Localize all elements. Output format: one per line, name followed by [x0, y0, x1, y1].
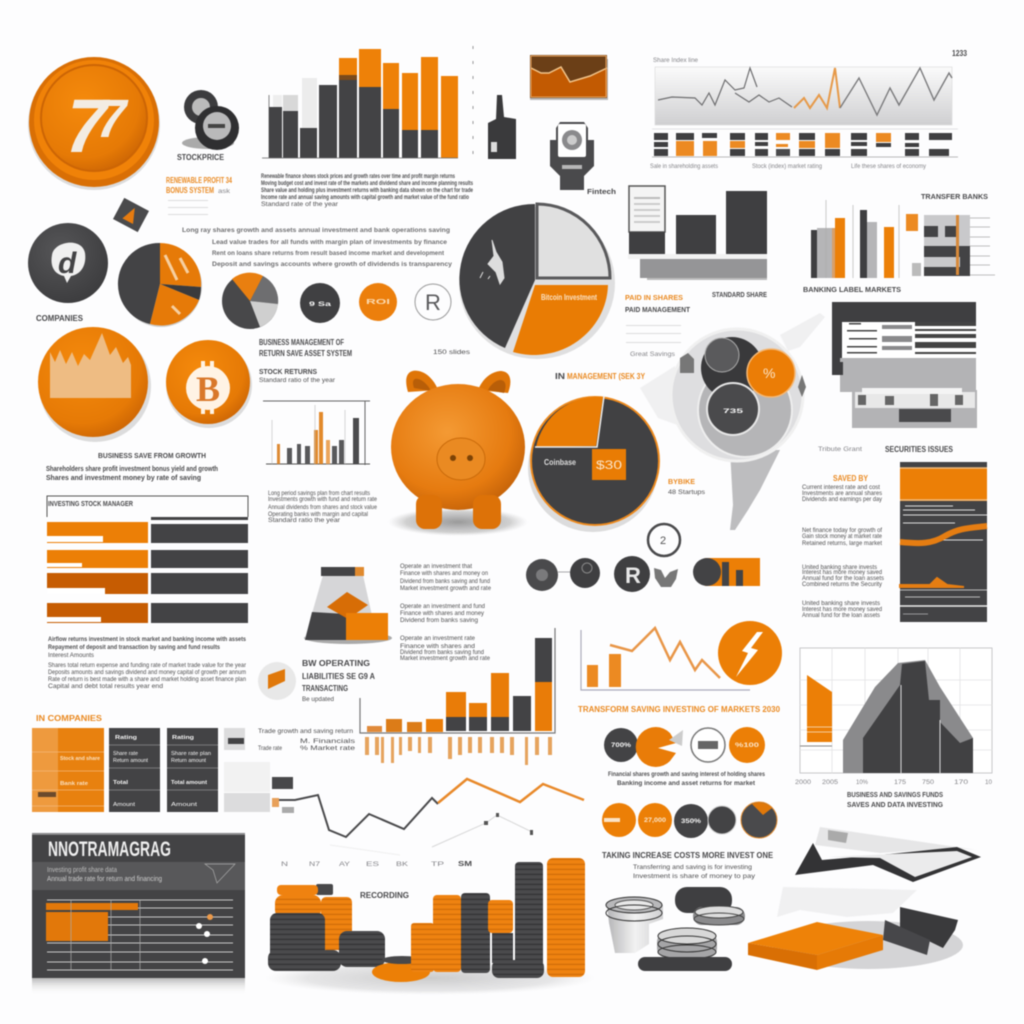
text block: right headings: Dividends and earnings per day [802, 497, 882, 503]
text block: left of lower chart: M. Financials [300, 739, 355, 745]
badge: 77 coin: 7 [56, 84, 117, 169]
area chart: mountain: SAVES AND DATA INVESTING [847, 802, 944, 809]
text block: beside funnel: Finance with shares and money on [400, 571, 488, 577]
text block: right headings: Interest has more money saved [802, 570, 882, 576]
caption: pie side note [668, 479, 705, 496]
big pie chart [459, 204, 615, 359]
text block: left of lower chart: Trade growth and saving return [258, 729, 353, 735]
pie chart: grey segments [222, 273, 278, 329]
icon: dark at-sign coin: d [58, 247, 77, 280]
line chart: dark then orange: TP [431, 862, 444, 868]
thumbnail: brown line chart [530, 55, 608, 100]
icon: small rotated tile [113, 198, 149, 232]
icons row: pacman and coins: 700% [611, 743, 632, 749]
table: dark column one: Total [113, 780, 129, 786]
line chart with stripes: top right: Sale in shareholding assets [650, 164, 718, 170]
line chart: dark then orange: BK [396, 862, 408, 868]
table chart: right stripes: TRANSFER BANKS [921, 194, 988, 201]
heading: chart title: RETURN SAVE ASSET SYSTEM [259, 349, 352, 358]
text block: left of globe: PAID MANAGEMENT [625, 307, 691, 314]
text block: top paragraph: Moving budget cost and invest rate of the markets and dividend share and income planning results [261, 181, 473, 187]
text block: bottom right caption [602, 851, 774, 880]
text block: right headings: Current interest rate and cost [802, 485, 880, 491]
text block: beside funnel: Operate an investment and fund [400, 604, 485, 610]
text block: left of globe: Great Savings [630, 352, 675, 358]
text block: beside funnel [400, 564, 492, 662]
text block: beside funnel: Market investment growth and rate [400, 656, 491, 662]
text block: right headings: Combined returns the Security [802, 582, 882, 588]
icon: stacked coins [177, 90, 239, 162]
table: orange column [32, 728, 104, 812]
bar chart: three dark bars: STANDARD SHARE [712, 292, 767, 299]
area chart: mountain: 10 [985, 780, 993, 786]
table: orange column: Bank rate [60, 781, 88, 787]
text block: beside funnel: Market investment growth and rate [400, 586, 492, 592]
line chart: dark then orange: ES [366, 862, 379, 868]
icon: smart watch [550, 122, 616, 196]
text block: left of globe [625, 295, 691, 358]
line chart: dark then orange: N7 [309, 862, 321, 868]
table: dark column two: Share rate plan [171, 751, 211, 757]
bar chart: small ticks [263, 401, 370, 465]
icon: dark circle label: 9 Sa [309, 302, 332, 308]
icon and heading: small globe title: BW OPERATING [302, 659, 370, 668]
text block: below table: Shares total return expense and funding rate of market trade value for the year [48, 663, 246, 669]
area chart: mountain: 175 [894, 780, 907, 786]
text block: under small chart: Operating banks with margin and capital [268, 512, 368, 518]
text block: below table: Airflow returns investment in stock market and banking income with assets [48, 637, 247, 643]
heading: chart title: 150 slides [433, 350, 470, 356]
text block: below table: Interest Amounts [48, 653, 94, 659]
text block: bottom right caption: TAKING INCREASE COSTS MORE INVEST ONE [602, 851, 774, 860]
area chart: mountain: 2005 [822, 780, 839, 786]
table: dark column one: Rating [115, 735, 137, 741]
text block: right headings: United banking share invests [802, 601, 880, 607]
text block: under small chart: Annual dividends from shares and stock value [268, 505, 378, 511]
text block: below table: Repayment of deposit and transaction by saving and fund results [48, 645, 221, 651]
text block: right headings: Net finance today for growth of [802, 528, 882, 534]
text block: second paragraph: Rent on loans share returns from result based income market and development [212, 251, 444, 257]
text block: below table: Capital and debt total results year end [48, 684, 163, 690]
column chart panel: right [900, 462, 987, 622]
table: dark column two: Rating [172, 735, 194, 741]
line chart: dark then orange [279, 779, 584, 868]
icons row: pacman and coins: %100 [735, 743, 760, 749]
heading: chart title [259, 338, 470, 384]
coin stacks: RECORDING [360, 891, 409, 900]
text block: bottom right caption: Investment is share of money to pay [633, 874, 755, 880]
text block: right headings: Investments are annual shares [802, 491, 882, 497]
globe with circles: 735 [723, 409, 744, 415]
line chart: dark then orange: N [281, 862, 288, 868]
text block: above table: Shareholders share profit investment bonus yield and growth [46, 466, 218, 473]
line chart: dark then orange: AY [339, 862, 350, 868]
text block: under small chart: Investments growth with fund and return rate [268, 497, 378, 503]
text block: beside funnel: Finance with shares and money [400, 611, 484, 617]
line chart with stripes: top right: Stock (index) market rating [752, 164, 822, 170]
caption: pie side note: BYBIKE [668, 479, 695, 486]
dark panel: bottom left chart: Annual trade rate for return and financing [47, 876, 162, 883]
heading: chart title: STOCK RETURNS [259, 369, 317, 376]
icon: R outline: R [425, 290, 441, 315]
icon: bitcoin coin: B [196, 369, 220, 409]
text block: top paragraph: Renewable finance shows stock prices and growth rates over time and profit margin returns [261, 174, 455, 180]
text block: left of lower chart: % Market rate [300, 746, 356, 752]
screen panel [832, 302, 977, 428]
area chart: mountain [795, 648, 993, 809]
icon and heading: small globe title: LIABILITIES SE G9 A [302, 672, 375, 681]
area chart: mountain: 750 [922, 780, 935, 786]
heading: orange caption left: ask [218, 189, 231, 195]
icon: orange circle label [359, 283, 397, 321]
caption: orange table title: IN COMPANIES [36, 714, 103, 723]
table: dark column two [167, 728, 218, 812]
globe with circles: % [763, 365, 775, 381]
text block: right headings: Annual fund for the loan assets [802, 576, 884, 582]
area chart: mountain: BUSINESS AND SAVINGS FUNDS [847, 792, 943, 799]
text block: under small chart: Standard ratio the year [268, 518, 340, 524]
line chart with stripes: top right: 1233 [952, 49, 967, 58]
table: orange and dark rows: INVESTING STOCK MANAGER [48, 501, 133, 508]
icon: dark at-sign coin [28, 223, 108, 323]
text block: beside funnel: Operate an investment rate [400, 636, 476, 642]
table: orange and dark rows [47, 496, 248, 623]
table: dark column two: Amount [171, 802, 198, 808]
heading: chart title: BUSINESS MANAGEMENT OF [259, 338, 344, 347]
text block: under pacman row: Financial shares growth and saving interest of holding shares [608, 772, 766, 778]
line chart with stripes: top right: Share Index line [653, 58, 699, 64]
caption: orange title above pie: MANAGEMENT (SEK 3Y [567, 372, 646, 381]
bar chart: lower stacked [360, 628, 555, 765]
table chart: right stripes [906, 194, 995, 276]
text block: top paragraph [261, 174, 474, 208]
text block: below table [48, 637, 247, 690]
pie chart: dark and orange [118, 243, 202, 327]
icon and heading: small globe title [258, 659, 375, 703]
table: dark column two: Return amount [171, 758, 207, 764]
globe with circles [640, 313, 825, 530]
icon: dark circle label [300, 283, 340, 323]
text block: left of lower chart [258, 729, 356, 752]
icon: stacked coins: STOCKPRICE [177, 153, 225, 162]
icons row: orange and dark coins [602, 802, 777, 838]
table: dark column one: Amount [113, 802, 136, 808]
text block: right headings: Retained returns, large market [802, 541, 882, 547]
text block: right headings: Tribute Grant [818, 447, 862, 453]
text block: under pacman row: Banking income and asset returns for market [617, 781, 755, 787]
text block: second paragraph: Lead value trades for all funds with margin plan of investments by finance [212, 240, 448, 246]
icons row: circles and banner [526, 524, 760, 592]
icon: raised hand [488, 95, 516, 159]
icon: dark at-sign coin: COMPANIES [36, 314, 84, 323]
dark panel: bottom left chart [32, 833, 245, 995]
big pie chart: Bitcoin Investment [541, 293, 597, 302]
table: dark column one: Share rate [113, 751, 138, 757]
text block: left of lower chart: Trade rate [258, 746, 283, 752]
area chart: mountain: 10% [856, 780, 869, 786]
bar chart: stacked top [262, 46, 473, 160]
heading: orange caption left: RENEWABLE PROFIT 34 [166, 176, 232, 185]
text block: under small chart: Long period savings plan from chart results [268, 491, 370, 497]
icon: bitcoin coin [166, 340, 252, 428]
icon: orange circle label: ROI [366, 299, 390, 306]
piggy bank [388, 371, 528, 536]
coin stacks [265, 858, 595, 995]
text block: above table: BUSINESS SAVE FROM GROWTH [98, 453, 206, 460]
text block: above table [46, 453, 218, 482]
icon: funnel with boxes [304, 567, 392, 644]
text block: beside funnel: Operate an investment that [400, 564, 472, 570]
table: dark column one: Return amount [113, 758, 149, 764]
text block: beside funnel: Dividend from banks saving fund [400, 650, 484, 656]
text block: right headings: Gain stock money at market rate [802, 534, 883, 540]
mini chart with bolt coin [581, 621, 782, 690]
text block: right headings: Interest has more money saved [802, 607, 882, 613]
heading: orange caption left [166, 176, 232, 215]
caption: pie side note: 48 Startups [668, 490, 705, 496]
text block: under pacman row [608, 772, 766, 787]
dark panel: bottom left chart: Investing profit share data [47, 867, 117, 874]
text block: second paragraph: Long ray shares growth and assets annual investment and bank operations saving [182, 228, 450, 234]
text block: beside funnel: Dividend from banks saving and fund [400, 579, 490, 585]
badge: 77 coin: 7 [90, 89, 133, 149]
table: orange column: Stock and share [60, 756, 100, 762]
icon: orange chart coin [38, 327, 151, 442]
icons row: orange and dark coins: 350% [681, 819, 702, 825]
text block: right headings: SECURITIES ISSUES [885, 445, 954, 454]
icons row: orange and dark coins: 27,000 [644, 818, 667, 824]
area chart: mountain: 170 [954, 780, 969, 786]
text block: second paragraph [182, 228, 453, 268]
icon and heading: small globe title: Be updated [302, 697, 334, 703]
text block: beside funnel: Finance with shares and [400, 644, 475, 650]
pie chart: coinbase: Coinbase [544, 458, 576, 467]
text block: right headings [802, 445, 954, 619]
text block: second paragraph: Deposit and savings accounts where growth of dividends is transparency [212, 262, 453, 268]
text block: top paragraph: Standard rate of the year [261, 202, 338, 208]
table: dark column one [109, 728, 160, 812]
text block: right headings: United banking share invests [802, 565, 877, 571]
line chart: dark then orange: SM [458, 861, 472, 868]
pie chart: coinbase: $30 [596, 458, 622, 472]
documents and wallet [748, 827, 981, 970]
icons row: circles and banner: 2 [660, 535, 666, 547]
caption: orange title above pie: IN [555, 372, 565, 381]
line chart with stripes: top right [650, 49, 967, 170]
area chart: mountain: 2000 [795, 780, 812, 786]
heading: orange mid right: TRANSFORM SAVING INVESTING OF MARKETS 2030 [578, 705, 781, 714]
heading: chart title: Standard ratio of the year [259, 378, 335, 384]
text block: below table: Deposits amounts and savings dividend and money capital of growth per annum [48, 670, 246, 676]
text block: under small chart [268, 491, 378, 524]
line chart with stripes: top right: Life these shares of economy [851, 164, 926, 170]
text block: beside funnel: Dividend from banks saving [400, 618, 478, 624]
grey boxes [224, 728, 294, 813]
dark panel: bottom left chart: NNOTRAMAGRAG [48, 838, 171, 861]
text block: right headings: SAVED BY [833, 474, 869, 483]
icons row: circles and banner: R [625, 563, 641, 588]
bar chart: grouped right [803, 200, 901, 294]
silver coins [606, 887, 745, 971]
bar chart: three dark bars [628, 186, 767, 299]
text block: bottom right caption: Transferring and saving is for investing [633, 865, 752, 871]
bar chart: grouped right: BANKING LABEL MARKETS [803, 287, 901, 294]
icon: smart watch: Fintech [587, 189, 616, 196]
heading: orange caption left: BONUS SYSTEM [166, 186, 214, 195]
icons row: pacman and coins [604, 727, 765, 767]
text block: top paragraph: Share value and holding plus investment returns with banking data shown on the chart for trade [261, 188, 474, 194]
icon and heading: small globe title: TRANSACTING [302, 684, 348, 693]
table: dark column two: Total amount [171, 780, 207, 786]
text block: top paragraph: Income rate and annual saving amounts with capital growth and market value of the fund ratio [261, 195, 469, 201]
text block: right headings: Annual fund for the loan assets [802, 613, 880, 619]
text block: left of globe: PAID IN SHARES [625, 295, 683, 302]
text block: below table: Rate of return is best made with a share and market holding asset finance plan [48, 677, 246, 683]
text block: above table: Shares and investment money by rate of saving [46, 475, 201, 482]
pie chart: coinbase [528, 396, 659, 532]
badge: 77 coin [28, 57, 160, 190]
icon: R outline [415, 284, 451, 320]
